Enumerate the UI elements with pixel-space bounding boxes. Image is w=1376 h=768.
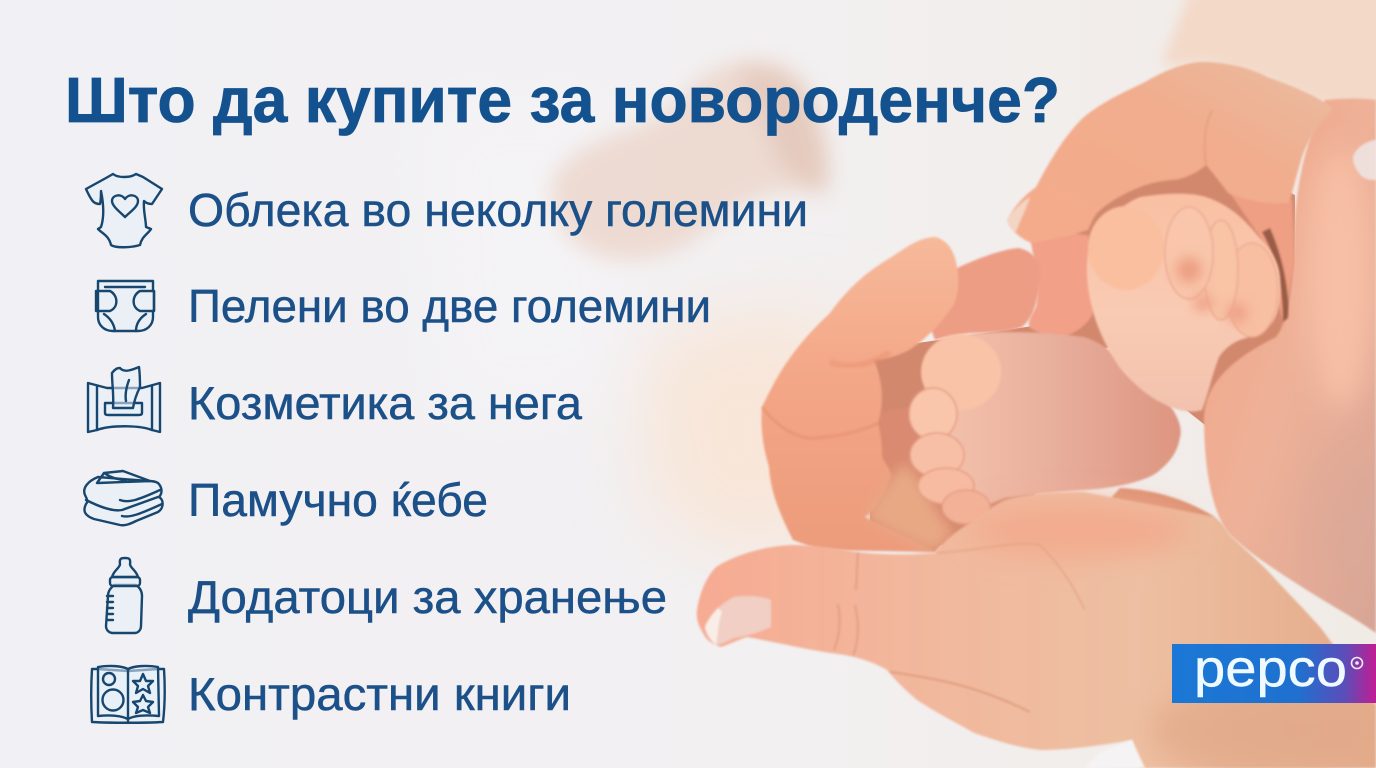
label: Облека во неколку големини — [188, 184, 808, 236]
baby foot lower — [909, 332, 1181, 524]
item: clothes in several sizes — [86, 174, 808, 247]
baby foot upper — [1087, 194, 1280, 412]
logo: pepco: pepco — [1194, 640, 1347, 698]
label: Пелени во две големини — [188, 280, 711, 332]
icon: folded cloth stack — [84, 471, 163, 525]
item: contrast books — [91, 666, 571, 723]
label: Памучно ќебе — [188, 474, 488, 526]
label: Додатоци за хранење — [188, 571, 667, 623]
label: Козметика за нега — [188, 377, 582, 429]
checklist — [84, 174, 808, 723]
item: cotton muslin — [84, 471, 488, 526]
shadow base inside the hands — [870, 160, 1295, 545]
label: Контрастни книги — [188, 668, 571, 720]
title: Што да купите за новороденче? — [65, 64, 1060, 136]
item: feeding accessories — [106, 558, 667, 633]
logo: pepco — [1172, 640, 1376, 703]
right hand behind with thumb — [1204, 98, 1376, 633]
upper hand: index and folded finger — [1007, 62, 1333, 338]
icon: diaper — [96, 281, 154, 331]
icon: wet wipes pack — [88, 367, 160, 432]
left hand: finger, middle finger and palm — [761, 237, 1041, 552]
bottom hand with thumb — [697, 488, 1376, 768]
icon: baby bottle — [106, 558, 142, 633]
item: care cosmetics — [88, 367, 582, 432]
icon: baby bodysuit — [86, 174, 162, 247]
item: diapers in two sizes — [96, 280, 711, 332]
icon: open contrast book — [91, 666, 165, 723]
